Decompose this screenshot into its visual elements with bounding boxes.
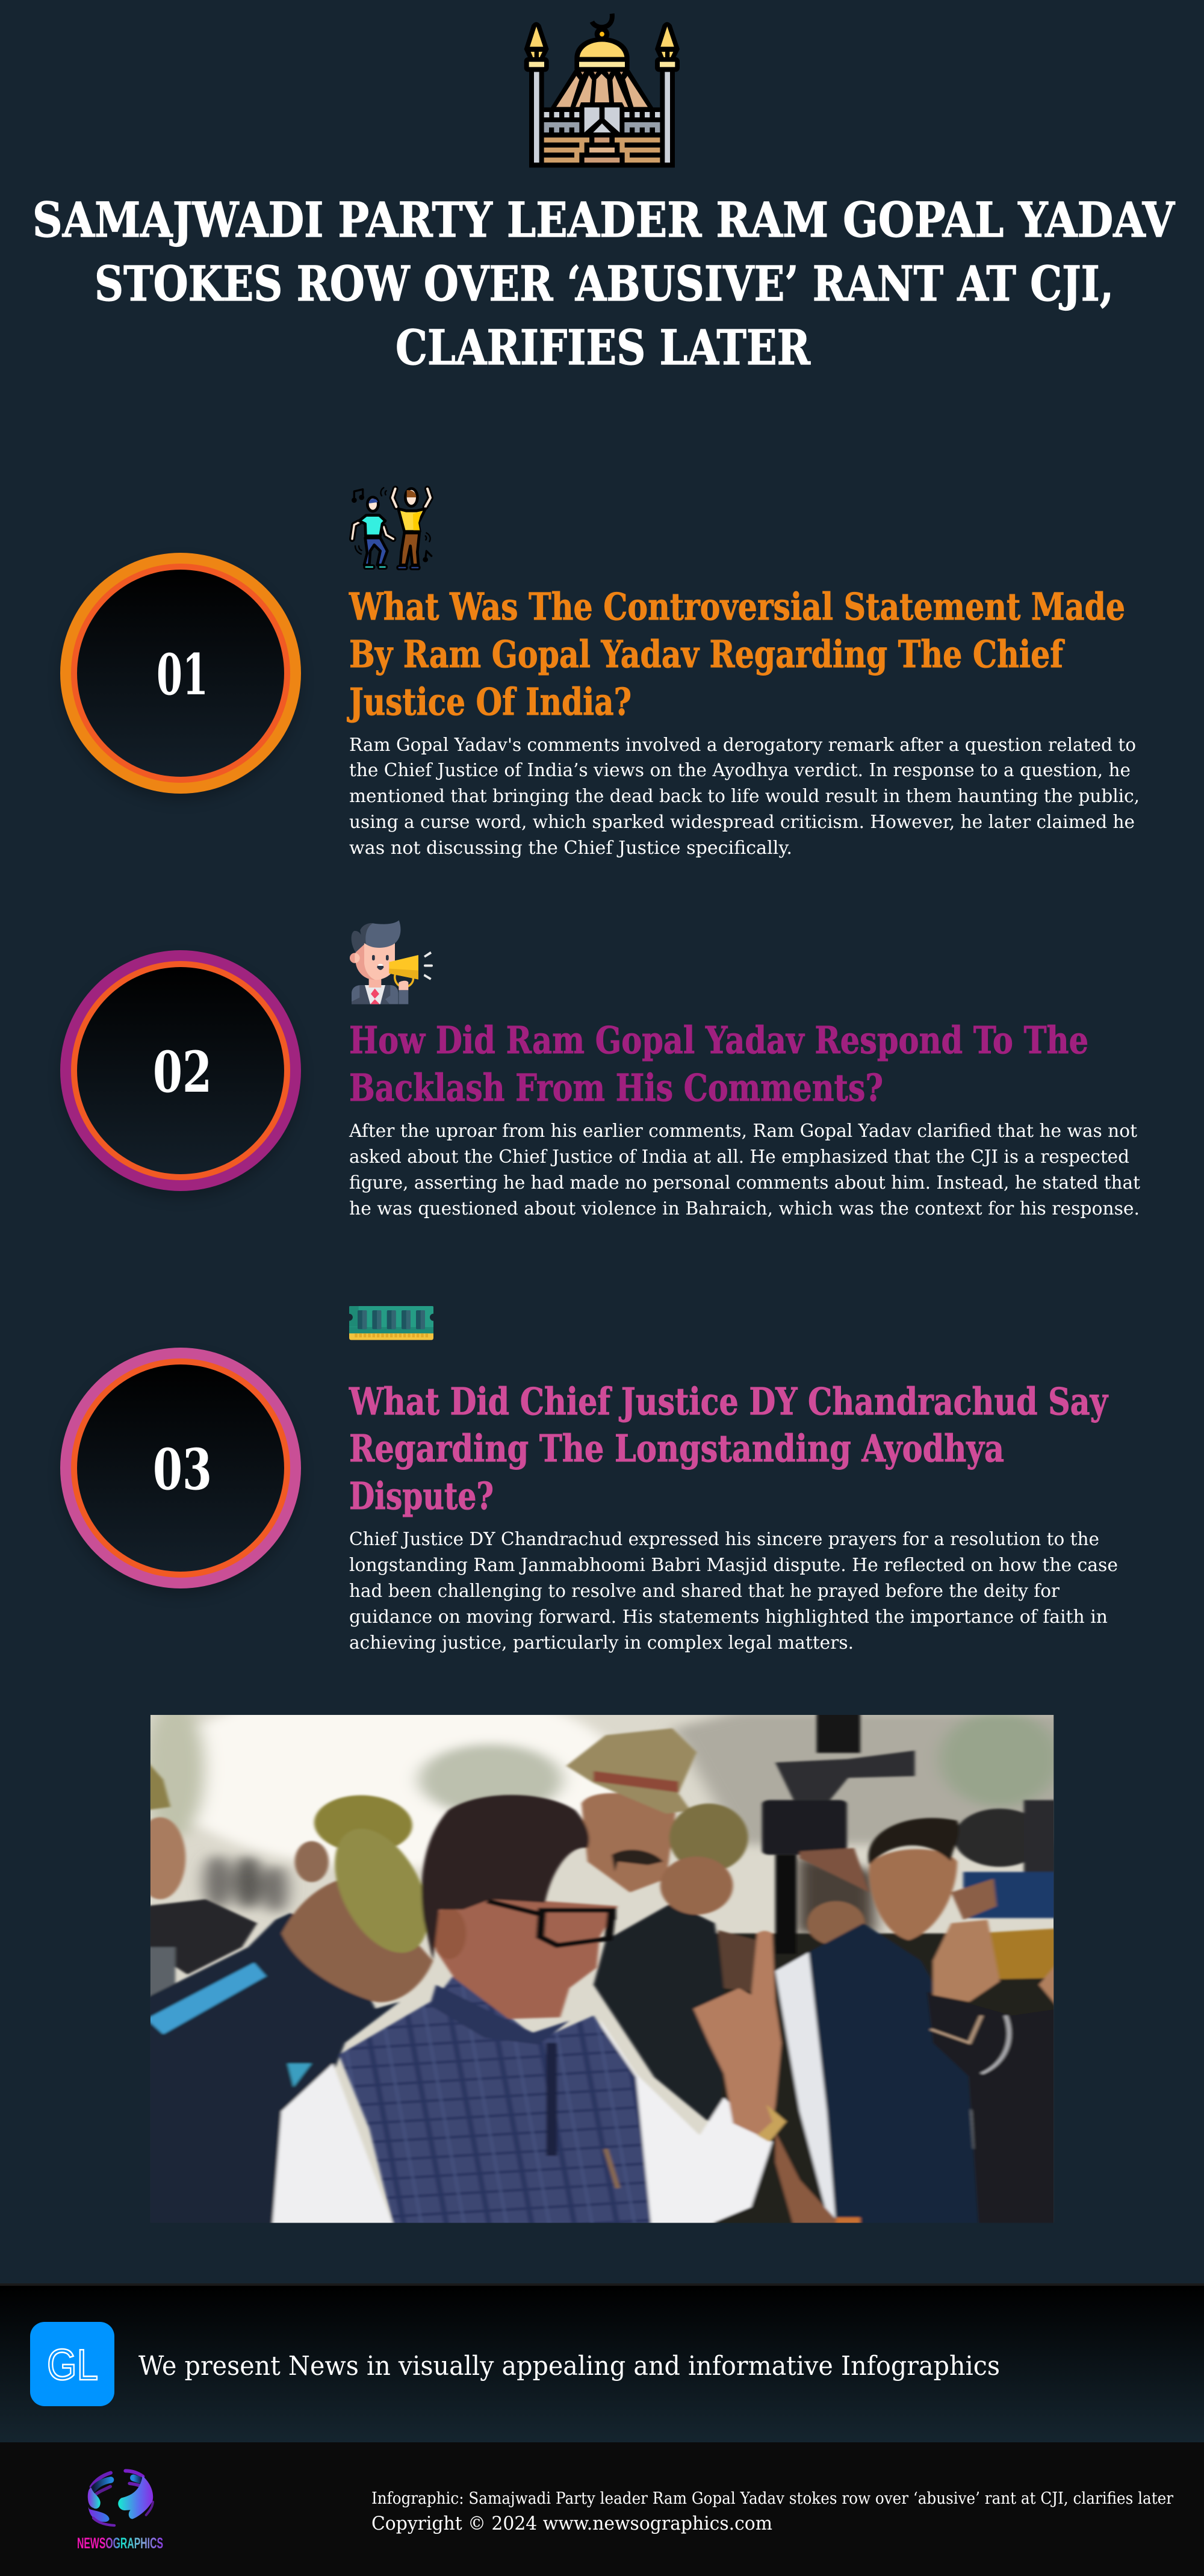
icon: man with megaphone [350,920,433,1004]
body text 2: he was questioned about violence in Bahraich, which was the context for his response. [349,1198,1140,1219]
icon: mosque [524,14,680,167]
body text 1: Ram Gopal Yadav's comments involved a derogatory remark after a question related to [349,735,1136,756]
body text 3: achieving justice, particularly in complex legal matters. [349,1632,854,1654]
body text 3 [349,1529,1118,1654]
icon: dancers [352,488,432,569]
heading 3 [349,1380,1109,1518]
body text 2 [349,1121,1140,1219]
icon: memory module [349,1306,433,1340]
panel: question 2 [60,920,1140,1219]
banner: tagline [0,2283,1204,2442]
body text 1: mentioned that bringing the dead back to life would result in them haunting the public, [349,786,1140,807]
photo: Ram Gopal Yadav with police and press [150,1715,1054,2223]
icon: GL logo [30,2322,114,2406]
heading 1: Justice Of India? [347,680,631,724]
body text 1: was not discussing the Chief Justice specifically. [349,838,792,859]
title [33,191,1176,376]
panel: question 3 [60,1306,1118,1654]
heading 1 [347,585,1125,724]
heading 3: Regarding The Longstanding Ayodhya [349,1426,1004,1470]
body text 3: guidance on moving forward. His statements highlighted the importance of faith in [349,1607,1108,1628]
heading 2 [349,1018,1088,1110]
number badge 03: 03 [153,1437,212,1503]
body text 1: the Chief Justice of India’s views on the Ayodhya verdict. In response to a question, he [349,760,1131,781]
heading 1: By Ram Gopal Yadav Regarding The Chief [349,632,1065,676]
icon: GL logo: GL [47,2341,98,2389]
body text 2: figure, asserting he had made no personal comments about him. Instead, he stated that [349,1172,1140,1193]
body text 3: longstanding Ram Janmabhoomi Babri Masjid dispute. He reflected on how the case [349,1555,1118,1576]
copyright: Copyright © 2024 www.newsographics.com [371,2513,772,2534]
heading 2: Backlash From His Comments? [349,1066,883,1110]
number badge 01: 01 [157,642,208,708]
number badge 02 [60,950,301,1197]
body text 3: Chief Justice DY Chandrachud expressed his sincere prayers for a resolution to the [349,1529,1099,1550]
number badge 03 [60,1348,301,1594]
tagline text: We present News in visually appealing and informative Infographics [138,2351,1000,2382]
logo: Newsographics [77,2471,163,2552]
number badge 01 [60,553,301,800]
body text 3: had been challenging to resolve and shared that he prayed before the deity for [349,1581,1060,1602]
logo: Newsographics: NEWSOGRAPHICS [77,2535,163,2552]
body text 2: asked about the Chief Justice of India at all. He emphasized that the CJI is a respected [349,1146,1129,1168]
body text 1: using a curse word, which sparked widespread criticism. However, he later claimed he [349,812,1135,833]
title: CLARIFIES LATER [396,319,810,376]
body text 2: After the uproar from his earlier comments, Ram Gopal Yadav clarified that he was not [349,1121,1137,1142]
body text 1 [349,735,1140,859]
panel: question 1 [60,488,1140,859]
number badge 02: 02 [153,1039,212,1106]
heading 3: Dispute? [349,1474,494,1518]
footer [0,2442,1204,2576]
